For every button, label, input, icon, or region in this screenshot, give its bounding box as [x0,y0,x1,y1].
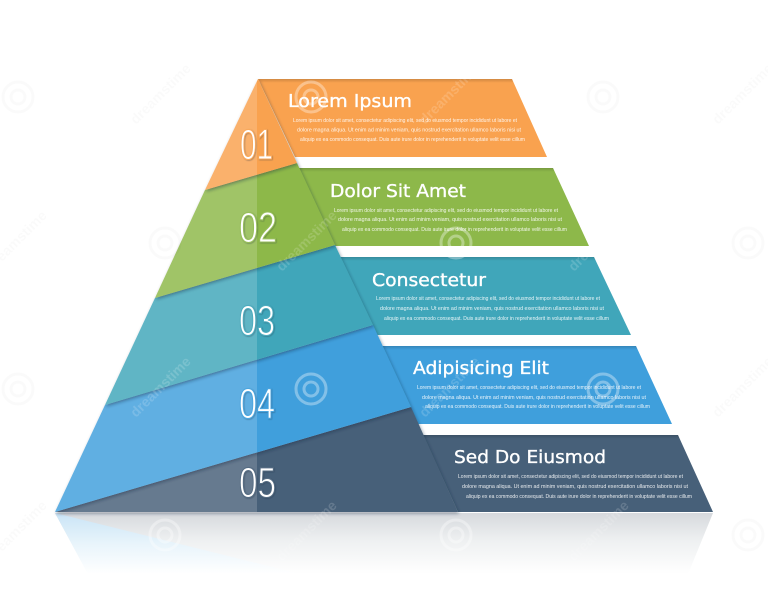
pyramid segment 05 [55,407,458,512]
watermark text: dreamstime [416,353,483,420]
watermark text: dreamstime [565,207,632,274]
text block: Adipisicing Elit body [417,385,650,410]
text block: Dolor Sit Amet body: aliquip ex ea commodo consequat. Duis aute irure dolor in reprehenderit in voluptate velit esse cillum [342,227,567,233]
watermark text: dreamstime [273,497,340,564]
panel: orange text band [258,79,547,157]
number 05: 05 [239,459,276,507]
heading: Adipisicing Elit: Adipisicing Elit [413,358,549,379]
watermark text: dreamstime [127,60,194,127]
text block: Dolor Sit Amet body: dolore magna aliqua. Ut enim ad minim veniam, quis nostrud exercitation ullamco laboris nisi ut [338,217,563,223]
number 01: 01 [240,121,273,169]
text block: Sed Do Eiusmod body: dolore magna aliqua. Ut enim ad minim veniam, quis nostrud exercitation ullamco laboris nisi ut [462,484,689,490]
pyramid segment 01 [205,79,297,190]
watermark text: dreamstime [127,353,194,420]
panel: teal text band [340,257,631,335]
number 04: 04 [239,380,275,428]
text block: Consectetur body: Lorem ipsum dolor sit amet, consectetur adipiscing elit, sed do eiusmod tempor incididunt ut labore et [376,296,601,302]
pyramid segment 04 [55,325,411,512]
pyramid segment 03 [105,245,373,405]
panel: dark text band [423,435,713,512]
text block: Sed Do Eiusmod body: Lorem ipsum dolor sit amet, consectetur adipiscing elit, sed do eiusmod tempor incididunt ut labore et [458,474,684,480]
text block: Consectetur body [376,296,609,322]
text block: Lorem Ipsum body: aliquip ex ea commodo consequat. Duis aute irure dolor in reprehenderit in voluptate velit esse cillum [300,137,525,143]
text block: Lorem Ipsum body [293,118,525,143]
text block: Dolor Sit Amet body [334,208,567,233]
text block: Consectetur body: dolore magna aliqua. Ut enim ad minim veniam, quis nostrud exercitation ullamco laboris nisi ut [380,306,605,312]
heading: Lorem Ipsum: Lorem Ipsum [288,91,412,112]
text block: Adipisicing Elit body: dolore magna aliqua. Ut enim ad minim veniam, quis nostrud exercitation ullamco laboris nisi ut [422,395,647,401]
text block: Consectetur body: aliquip ex ea commodo consequat. Duis aute irure dolor in reprehenderit in voluptate velit esse cillum [384,316,609,322]
watermark text: dreamstime [273,207,340,274]
number 03: 03 [239,297,275,345]
text block: Adipisicing Elit body: Lorem ipsum dolor sit amet, consectetur adipiscing elit, sed do eiusmod tempor incididunt ut labore et [417,385,642,391]
watermark text: dreamstime [416,60,483,127]
number 02: 02 [239,204,277,252]
pyramid segment 02 [155,163,335,298]
watermark text: dreamstime [565,497,632,564]
panel: blue text band [381,346,672,424]
text block: Dolor Sit Amet body: Lorem ipsum dolor sit amet, consectetur adipiscing elit, sed do eiusmod tempor incididunt ut labore et [334,208,559,214]
text block: Lorem Ipsum body: dolore magna aliqua. Ut enim ad minim veniam, quis nostrud exercitation ullamco laboris nisi ut [297,128,522,134]
panel: green text band [297,168,589,246]
watermark spirals [3,82,763,550]
reflection under pyramid [55,513,713,574]
heading: Dolor Sit Amet: Dolor Sit Amet [330,181,466,202]
heading: Consectetur: Consectetur [372,270,487,291]
text block: Sed Do Eiusmod body [458,474,692,500]
text block: Adipisicing Elit body: aliquip ex ea commodo consequat. Duis aute irure dolor in reprehenderit in voluptate velit esse cillum [425,404,650,410]
text block: Lorem Ipsum body: Lorem ipsum dolor sit amet, consectetur adipiscing elit, sed do eiusmod tempor incididunt ut labore et [293,118,518,124]
heading: Sed Do Eiusmod: Sed Do Eiusmod [454,447,606,468]
text block: Sed Do Eiusmod body: aliquip ex ea commodo consequat. Duis aute irure dolor in reprehenderit in voluptate velit esse cillum [466,494,692,500]
